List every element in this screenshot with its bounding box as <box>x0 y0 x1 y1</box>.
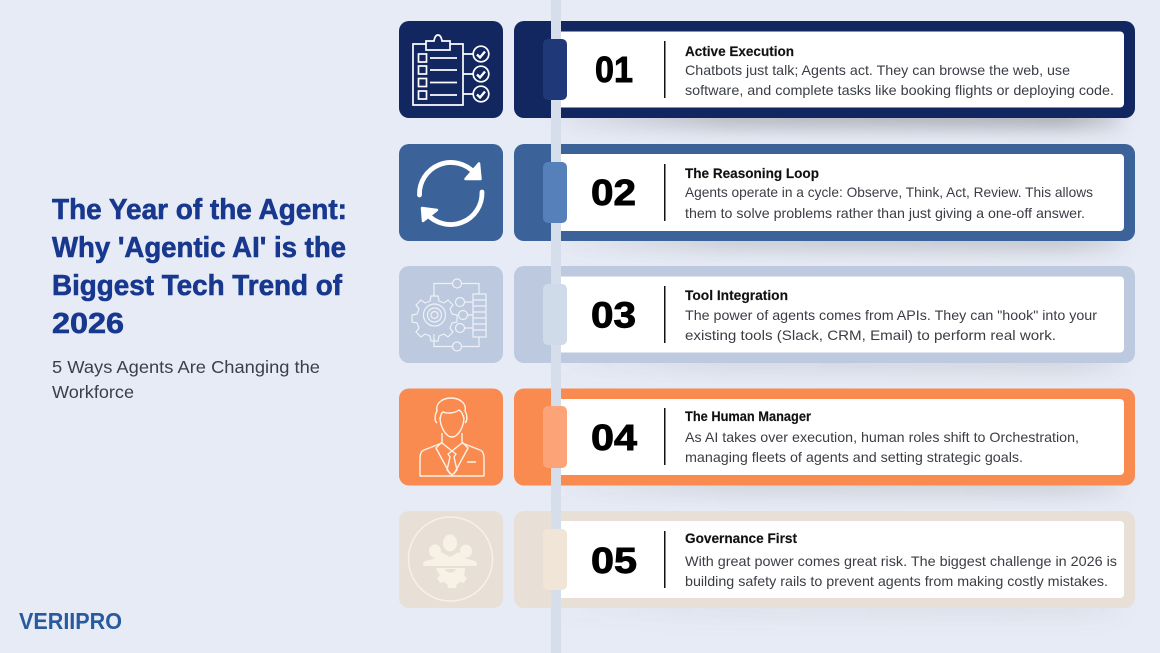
text block: building safety rails to prevent agents from making costly mistakes. <box>685 573 1108 589</box>
timeline tabs <box>543 39 567 590</box>
text block: Agents operate in a cycle: Observe, Think, Act, Review. This allows <box>685 184 1093 200</box>
text block <box>685 165 1093 221</box>
number: 02 <box>591 172 636 213</box>
text block: managing fleets of agents and setting strategic goals. <box>685 449 1023 465</box>
text block: As AI takes over execution, human roles shift to Orchestration, <box>685 429 1079 445</box>
icon: checklist <box>399 21 503 118</box>
subtitle: 5 Ways Agents Are Changing the <box>52 357 320 377</box>
number: 01 <box>595 49 633 90</box>
title: The Year of the Agent: <box>52 194 347 226</box>
panel: 01 card <box>399 21 1135 118</box>
text block: Governance First <box>685 530 797 546</box>
icon: team with gear <box>399 511 503 608</box>
text block: Active Execution <box>685 43 794 59</box>
card shadows <box>561 104 1121 618</box>
title: Biggest Tech Trend of <box>52 270 342 302</box>
text block <box>685 287 1097 343</box>
text block: them to solve problems rather than just giving a one-off answer. <box>685 205 1085 221</box>
text block: The power of agents comes from APIs. They can "hook" into your <box>685 307 1097 323</box>
text block: With great power comes great risk. The biggest challenge in 2026 is <box>685 553 1117 569</box>
number: 05 <box>591 540 637 581</box>
text block <box>685 530 1117 589</box>
title: Why 'Agentic AI' is the <box>52 232 346 264</box>
logo: VERIIPRO <box>19 608 122 634</box>
text block <box>685 408 1079 465</box>
number: 03 <box>591 294 636 336</box>
panel: 05 card <box>399 511 1135 608</box>
icon: gear integration <box>399 266 503 363</box>
text block <box>685 43 1114 98</box>
text block: The Human Manager <box>685 408 811 424</box>
panel: 04 card <box>399 388 1135 486</box>
number: 04 <box>591 417 637 458</box>
panel: 03 card <box>399 266 1135 363</box>
icon: cycle arrows <box>399 144 503 241</box>
title <box>52 194 347 340</box>
subtitle: Workforce <box>52 382 134 402</box>
subtitle <box>52 357 320 402</box>
text block: existing tools (Slack, CRM, Email) to perform real work. <box>685 327 1056 343</box>
text block: software, and complete tasks like booking flights or deploying code. <box>685 82 1114 98</box>
text block: Tool Integration <box>685 287 788 303</box>
timeline bar <box>551 0 561 653</box>
text block: The Reasoning Loop <box>685 165 819 181</box>
panel: 02 card <box>399 144 1135 241</box>
text block: Chatbots just talk; Agents act. They can browse the web, use <box>685 62 1070 78</box>
title: 2026 <box>52 308 124 340</box>
icon: manager <box>399 388 503 486</box>
